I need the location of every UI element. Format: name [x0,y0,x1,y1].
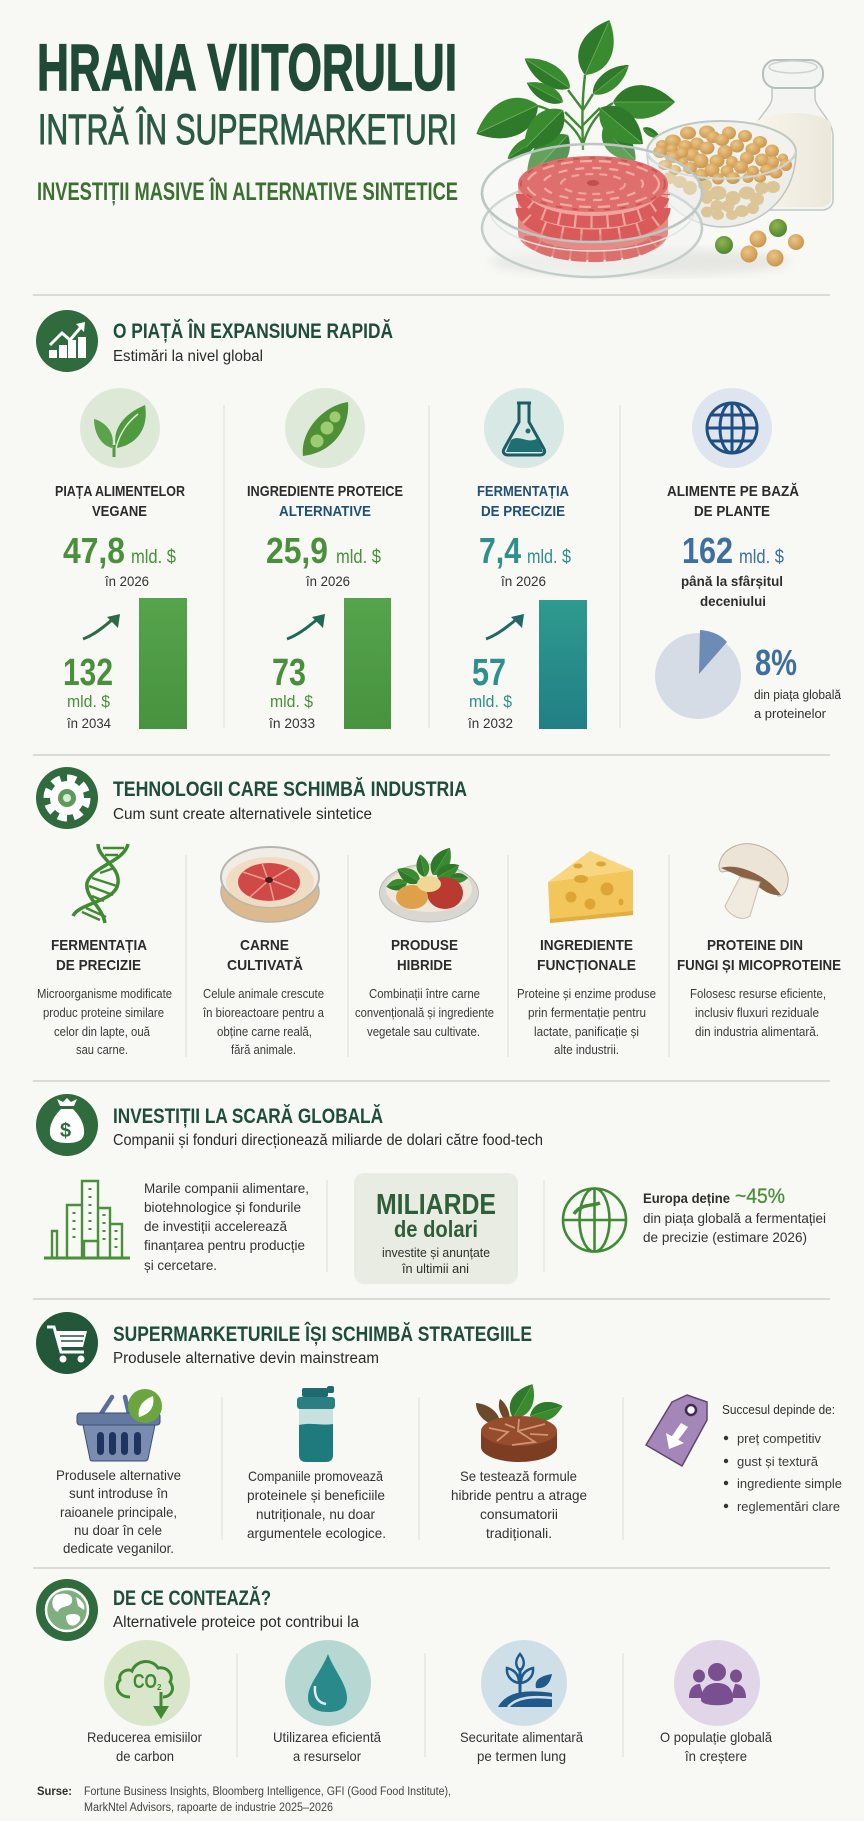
description [37,986,172,1057]
icon: growth chart [36,310,98,372]
pie caption: 8% [755,642,797,683]
description: Celule animale crescute [203,986,324,1001]
heading: O PIAȚĂ ÎN EXPANSIUNE RAPIDĂ [113,319,393,343]
value: până la sfârșitul [681,573,783,589]
bar [139,598,187,729]
label [677,937,841,974]
label: de carbon [116,1748,174,1764]
value 2026: mld. $ [131,547,176,568]
divider [33,294,830,296]
column: cultivated meat [202,847,325,1057]
title line two: INTRĂ ÎN SUPERMARKETURI [38,106,457,154]
icon: DNA helix [73,844,128,923]
description: Produsele alternative [56,1467,181,1483]
section: technologies [36,767,841,1057]
title: HRANA VIITORULUI [37,30,457,104]
callout: billions of dollars [354,1173,518,1284]
subheading: Produsele alternative devin mainstream [113,1350,379,1367]
description: sunt introduse în [69,1485,168,1501]
label [273,1729,381,1764]
benefit: food security [460,1640,583,1764]
pie chart: 8 percent [655,630,741,719]
section: supermarket strategies [36,1312,842,1556]
description: din industria alimentară. [695,1024,819,1039]
label: DE PLANTE [694,503,770,520]
success factor list: preț competitiv [737,1431,821,1446]
section: global investment [36,1094,826,1284]
icon: buildings [44,1181,130,1258]
column: precision fermentation [467,388,587,731]
top layer of beans [653,126,792,184]
label: FUNGI ȘI MICOPROTEINE [677,957,841,974]
section: market expansion [36,310,841,731]
success factor list: gust și textură [737,1454,819,1469]
icon: seedling on field [481,1640,567,1726]
label: ALIMENTE PE BAZĂ [667,483,799,500]
icon: mushroom [719,844,788,918]
divider [33,1567,830,1569]
value forecast [63,652,113,731]
heading: DE CE CONTEAZĂ? [113,1587,271,1610]
value forecast [268,652,315,731]
investors text: finanțarea pentru producție [144,1237,305,1253]
Europe share text: din piața globală a fermentației [643,1210,826,1226]
subheading: Alternativele proteice pot contribui la [113,1614,359,1631]
description: argumentele ecologice. [247,1525,386,1541]
success factor list: ingrediente simple [737,1476,842,1491]
sources: MarkNtel Advisors, rapoarte de industrie 2025–2026 [84,1802,333,1814]
description [202,986,325,1057]
description: tradiționali. [486,1525,552,1541]
icon: CO2 cloud: 2 [157,1683,162,1692]
column: hybrid formulas [451,1379,587,1541]
description: raioanele principale, [60,1504,177,1520]
description: produc proteine similare [43,1005,164,1020]
label [667,483,799,520]
column: precision fermentation [37,844,172,1057]
section header [36,1579,359,1641]
heading: INVESTIȚII LA SCARĂ GLOBALĂ [113,1105,383,1128]
benefit: growing population [660,1640,772,1764]
value forecast: 132 [63,652,113,694]
value forecast: mld. $ [270,692,314,711]
value 2026: 7,4 [479,530,521,571]
description: consumatorii [480,1506,558,1522]
label [87,1729,202,1764]
description [517,986,656,1057]
column: plant-based foods [655,388,841,721]
callout: billions of dollars: în ultimii ani [401,1261,469,1276]
subheading: Companii și fonduri direcționează miliarde de dolari către food-tech [113,1132,543,1149]
arrow [287,614,325,639]
sources [37,1786,451,1814]
icon: gear [36,767,98,829]
value forecast: în 2034 [66,715,111,731]
icon: basket with leaf badge [77,1389,162,1461]
divider [33,754,830,756]
pie caption: din piața globală [754,688,841,702]
investors text: și cercetare. [144,1257,217,1273]
description: lactate, panificație și [534,1024,639,1039]
bar [344,598,391,729]
description: alte industrii. [554,1042,619,1057]
icon: petri dish [221,847,319,922]
value 2026: în 2026 [500,573,546,589]
label: PROTEINE DIN [707,937,803,954]
icon: hybrid plate [380,843,478,922]
Europe share text: Europa deține [643,1190,730,1206]
label: ALTERNATIVE [279,503,371,520]
heading: TEHNOLOGII CARE SCHIMBĂ INDUSTRIA [113,778,467,801]
arrow [486,614,524,639]
description: prin fermentație pentru [528,1005,646,1020]
label [247,483,403,520]
Europe share text [643,1185,826,1245]
label [55,483,185,520]
value 2026: mld. $ [527,547,571,568]
label [51,937,147,974]
value forecast: 73 [272,652,306,694]
investors text: de investiții accelerează [144,1218,287,1234]
bowl of soybeans [647,121,796,227]
arrow [83,614,120,639]
label: DE PRECIZIE [481,503,565,520]
label [391,937,458,974]
success factor list: reglementări clare [737,1499,840,1514]
label [477,483,569,520]
label: PIAȚA ALIMENTELOR [55,483,185,500]
column: mainstream aisles [56,1389,181,1556]
description: vegetale sau cultivate. [367,1024,480,1039]
label [460,1729,583,1764]
value 2026 [479,530,571,589]
section header [36,1312,532,1374]
value 2026: în 2026 [104,573,149,589]
icon: pea pod [285,388,365,468]
description: fără animale. [231,1042,296,1057]
loose peas and beans [715,219,804,266]
description: convențională și ingrediente [355,1005,494,1020]
column: protein promotion [247,1386,386,1541]
subheading: Estimări la nivel global [113,348,263,365]
sources: Surse: [37,1786,72,1798]
label: Securitate alimentară [460,1729,583,1745]
value forecast: 57 [472,652,506,694]
description: Proteine și enzime produse [517,986,656,1001]
benefit: lower carbon emissions [87,1640,202,1764]
value [681,530,784,609]
value 2026 [266,530,381,589]
description: nu doar în cele [74,1522,162,1538]
icon: leaves [80,388,160,468]
bar [539,600,587,729]
divider [33,1080,830,1082]
icon: globe [692,388,772,468]
icon: people [674,1640,760,1726]
description: obține carne reală, [217,1024,312,1039]
value forecast: mld. $ [469,692,513,711]
label: DE PRECIZIE [56,957,141,974]
header: title block [37,30,458,206]
section header [36,1094,543,1156]
icon: globe outline [563,1188,626,1252]
label: Utilizarea eficientă [273,1729,381,1745]
column: functional ingredients [517,851,656,1057]
value 2026 [63,530,176,589]
label: în creștere [684,1748,747,1764]
label: O populație globală [660,1729,772,1745]
icon: CO2 cloud: CO [133,1671,157,1693]
callout: billions of dollars: investite și anunțate [382,1245,490,1260]
description: nutriționale, nu doar [256,1506,375,1522]
value: 162 [682,530,733,571]
subheading: Cum sunt create alternativele sintetice [113,806,372,823]
icon: flask [484,388,564,468]
petri dish with cultivated meat [482,144,702,277]
description: proteinele și beneficiile [247,1487,385,1503]
label: FERMENTAȚIA [51,937,147,954]
column: fungi and mycoprotein [677,844,841,1039]
column: vegan food market [55,388,187,731]
icon: protein shaker [297,1386,335,1462]
label: FERMENTAȚIA [477,483,569,500]
benefit: efficient resource use [273,1640,381,1764]
label [660,1729,772,1764]
label: INGREDIENTE PROTEICE [247,483,403,500]
label: PRODUSE [391,937,458,954]
icon: water drop [285,1640,371,1726]
value forecast: în 2033 [268,715,315,731]
sources: Fortune Business Insights, Bloomberg Intelligence, GFI (Good Food Institute), [84,1786,451,1798]
description: Folosesc resurse eficiente, [690,986,826,1001]
description: Se testează formule [460,1468,577,1484]
success factor list [722,1402,842,1514]
pie caption [754,642,841,721]
callout: billions of dollars: MILIARDE [376,1189,496,1221]
success factor list: Succesul depinde de: [722,1402,835,1417]
icon: patty with leaves [476,1379,565,1462]
value forecast: mld. $ [67,692,111,711]
subtitle: INVESTIȚII MASIVE ÎN ALTERNATIVE SINTETICE [37,176,458,206]
label: Reducerea emisiilor [87,1729,202,1745]
icon: money bag: $ [60,1120,71,1142]
description: Combinații între carne [369,986,480,1001]
icon: money bag [36,1094,98,1156]
hero illustration: cultivated meat, soy and milk [469,14,833,277]
value forecast [467,652,513,731]
label: INGREDIENTE [540,937,633,954]
column: alternative protein ingredients [247,388,403,731]
callout: billions of dollars: de dolari [394,1216,478,1242]
icon: shopping cart [36,1312,98,1374]
investors text [144,1180,309,1273]
description [451,1468,587,1541]
value 2026: în 2026 [305,573,350,589]
section header [36,767,467,829]
value 2026: mld. $ [336,547,381,568]
description: Microorganisme modificate [37,986,172,1001]
label: VEGANE [92,503,147,520]
pie caption: a proteinelor [754,707,826,721]
description: celor din lapte, ouă [54,1024,151,1039]
icon: price tag with down arrow [646,1395,707,1466]
description: în bioreactoare pentru a [202,1005,325,1020]
milk bottle [753,60,833,210]
meat patty [518,156,668,260]
label: a resurselor [293,1748,361,1764]
label [227,937,303,974]
plant [469,14,675,190]
column: success factors [646,1395,842,1514]
label [537,937,636,974]
description: dedicate veganilor. [63,1540,174,1556]
section header [36,310,393,372]
icon: cheese [548,851,633,923]
column: hybrid products [355,843,494,1039]
value 2026: 47,8 [63,530,125,571]
description: inclusiv fluxuri reziduale [695,1005,819,1020]
divider [33,1298,830,1300]
label: FUNCȚIONALE [537,957,636,974]
Europe share text: ~45% [735,1185,785,1208]
description [247,1468,386,1541]
description: sau carne. [76,1042,128,1057]
value: mld. $ [739,547,784,568]
description [355,986,494,1039]
heading: SUPERMARKETURILE ÎȘI SCHIMBĂ STRATEGIILE [113,1322,532,1346]
icon: CO2 cloud [104,1640,190,1726]
label: CULTIVATĂ [227,957,303,974]
section: why it matters [36,1579,772,1764]
label: CARNE [240,937,289,954]
value forecast: în 2032 [467,715,513,731]
value 2026: 25,9 [266,530,328,571]
value: deceniului [700,593,766,609]
description [56,1467,181,1556]
beans seen through glass [663,172,780,220]
description: Companiile promovează [248,1468,383,1484]
description [690,986,826,1039]
investors text: Marile companii alimentare, [144,1180,309,1196]
label: pe termen lung [477,1748,566,1764]
label: HIBRIDE [397,957,452,974]
investors text: biotehnologice și fondurile [144,1199,301,1215]
description: hibride pentru a atrage [451,1487,587,1503]
Europe share text: de precizie (estimare 2026) [643,1229,807,1245]
icon: earth [36,1579,98,1641]
